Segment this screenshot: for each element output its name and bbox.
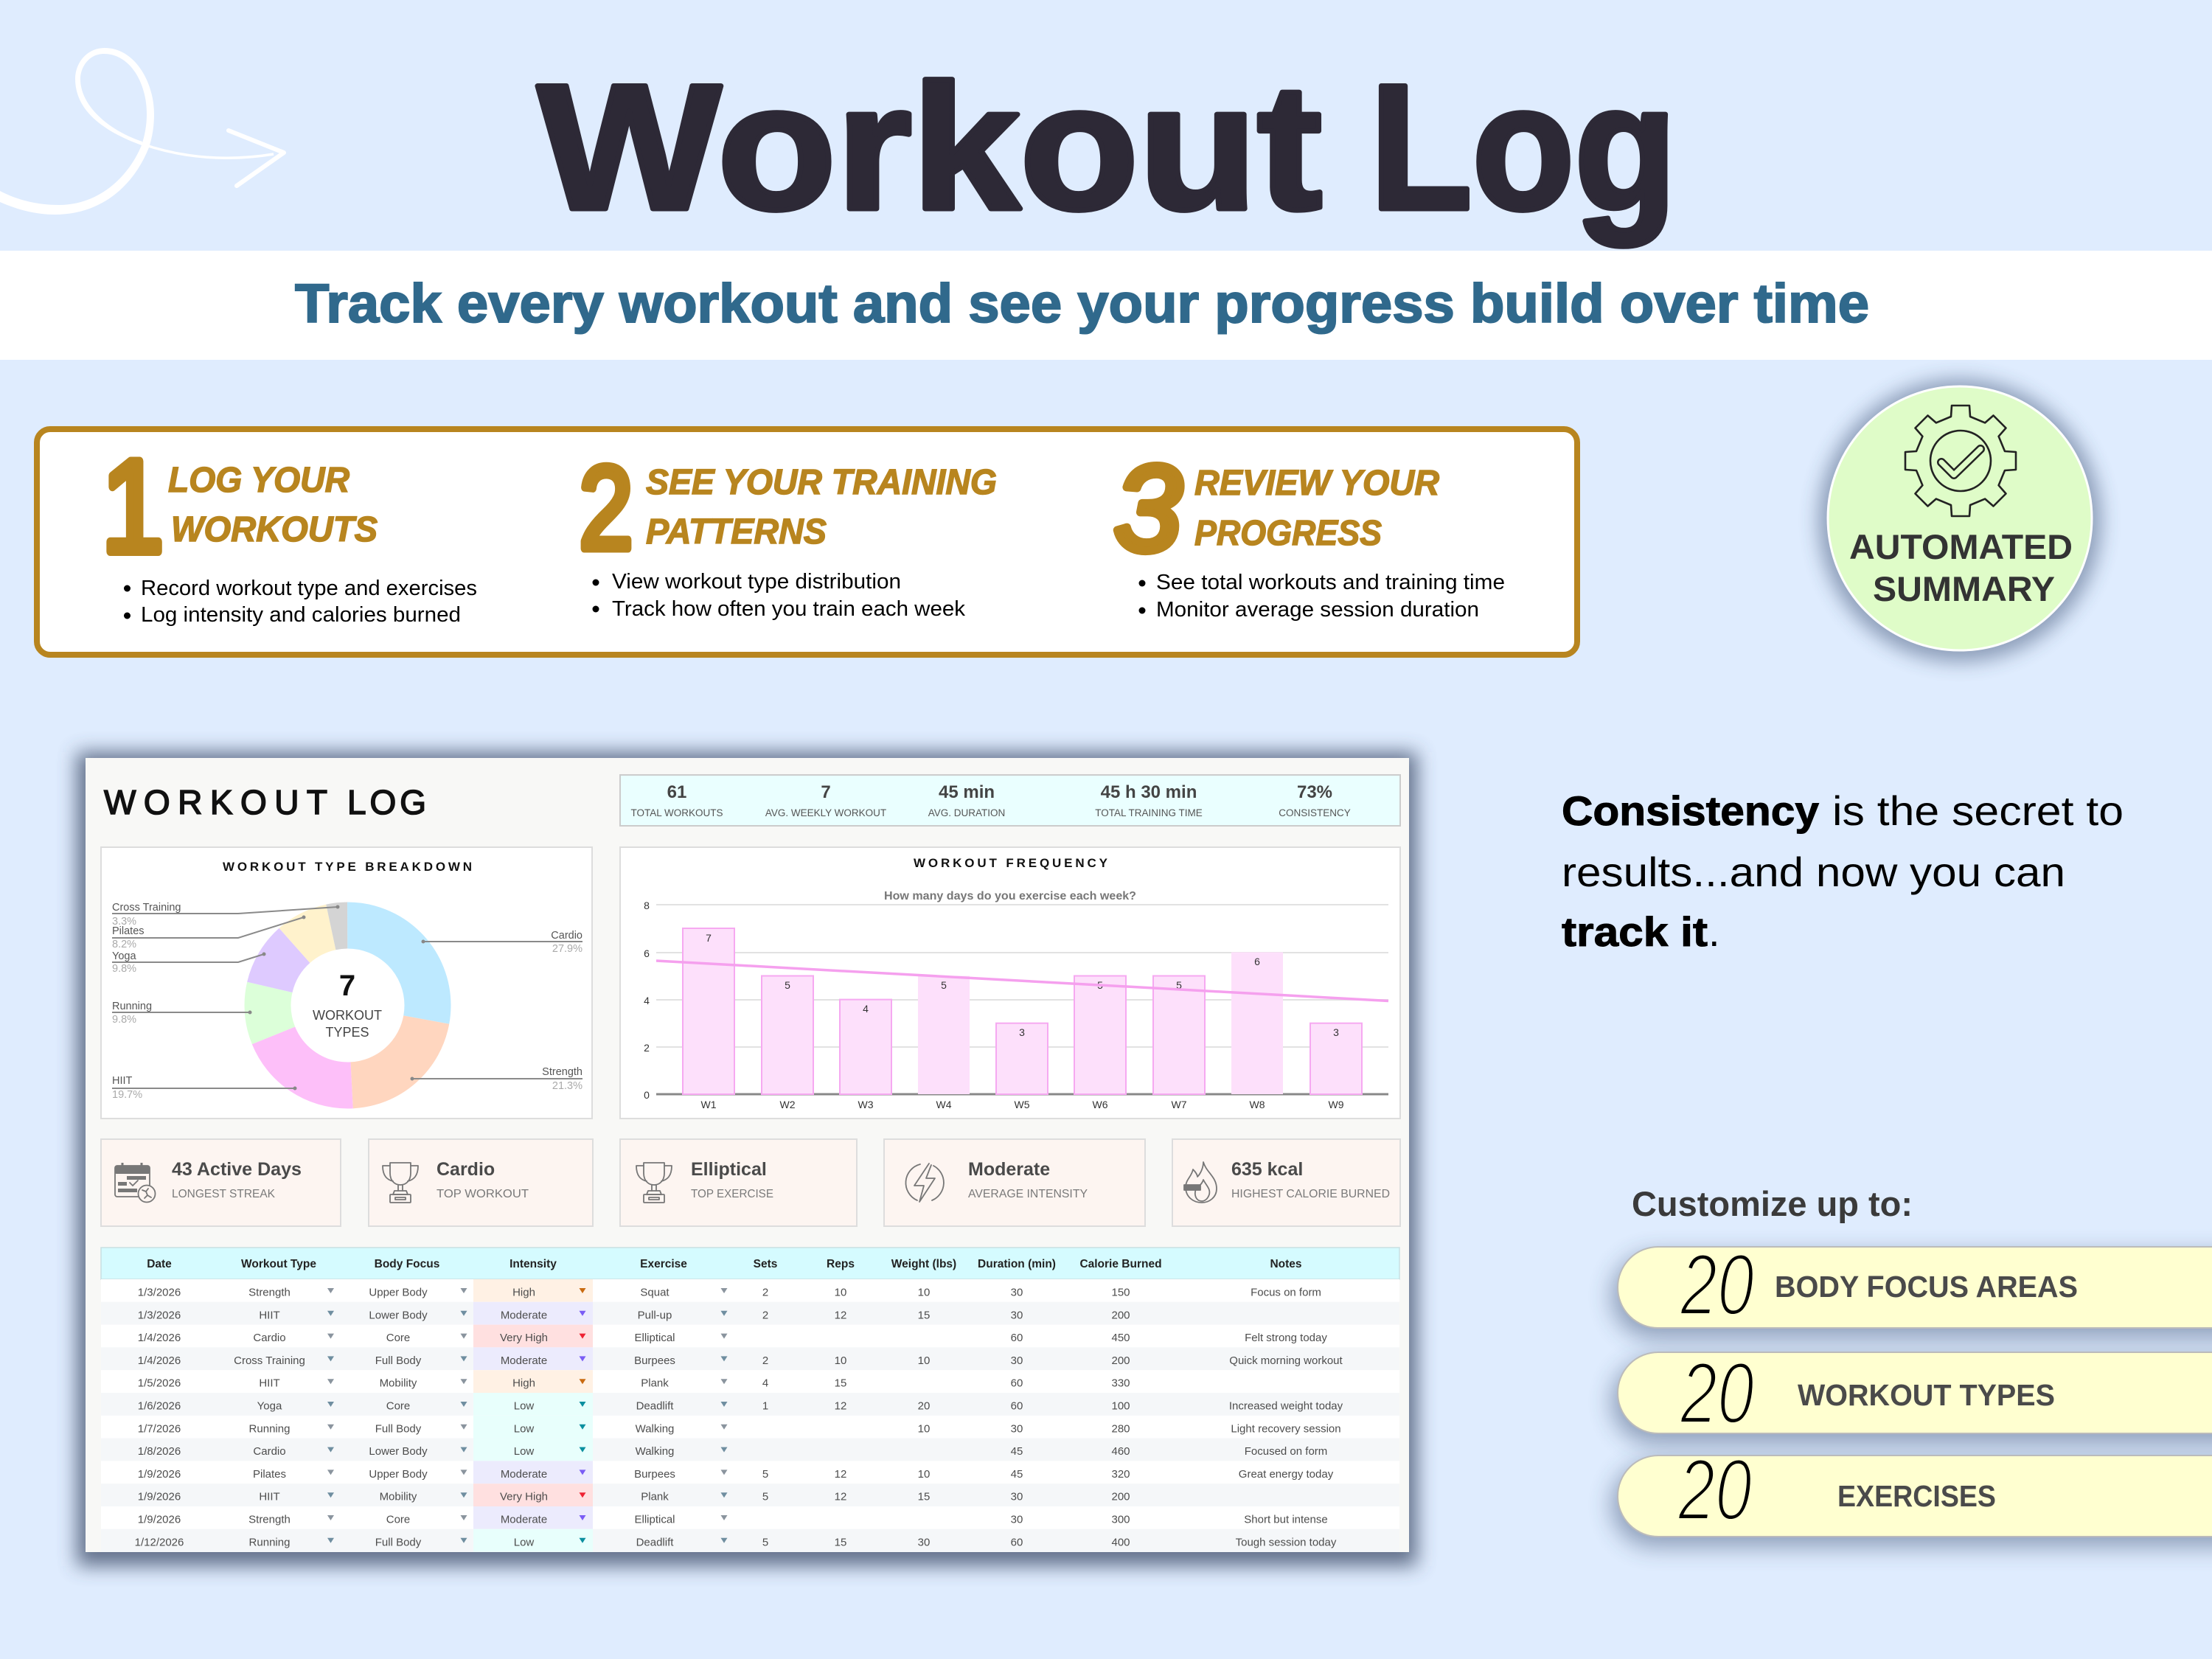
table row 5: Mobility xyxy=(380,1377,417,1390)
bar chart: 8 xyxy=(644,900,650,911)
step 3: 3 xyxy=(1114,441,1182,576)
stat card: top exercise: TOP EXERCISE xyxy=(691,1188,773,1200)
bar chart: 0 xyxy=(644,1089,650,1101)
stat card: average intensity xyxy=(884,1139,1145,1226)
donut centre label: WORKOUT xyxy=(313,1008,382,1023)
table row 3: Felt strong today xyxy=(1245,1332,1327,1344)
table row 11: Moderate xyxy=(501,1513,547,1526)
table row 7: 280 xyxy=(1111,1422,1130,1435)
stat card: active days xyxy=(101,1139,341,1226)
stat card: top workout xyxy=(369,1139,593,1226)
pill: body focus areas: BODY FOCUS AREAS xyxy=(1775,1270,2078,1304)
title: Log xyxy=(1370,48,1677,247)
table row 12: 5 xyxy=(762,1536,768,1548)
table row 2: HIIT xyxy=(259,1309,280,1321)
table header: Notes xyxy=(1270,1258,1302,1270)
icon: flame xyxy=(1184,1162,1217,1203)
table row 4: 10 xyxy=(835,1354,846,1367)
bar chart: W2 xyxy=(780,1099,796,1110)
bar chart: W7 xyxy=(1171,1099,1187,1110)
table row 10: 1/9/2026 xyxy=(138,1491,181,1503)
text block: consistency message xyxy=(1562,787,2124,955)
pill: workout types xyxy=(1612,1345,2212,1444)
table row 2: 30 xyxy=(1011,1309,1023,1321)
table row 1: 10 xyxy=(835,1286,846,1299)
bar chart: 4 xyxy=(644,995,650,1006)
icon: calendar xyxy=(115,1163,155,1202)
title: Workout xyxy=(538,48,1322,247)
bar chart: 7 xyxy=(706,932,712,944)
table row 10 xyxy=(101,1484,1399,1506)
stat card: active days: 43 Active Days xyxy=(172,1159,302,1180)
table row 1: Squat xyxy=(640,1286,669,1299)
table row 2: 2 xyxy=(762,1309,768,1321)
table row 8: 460 xyxy=(1111,1445,1130,1458)
donut leader lines and labels: 8.2% xyxy=(112,939,136,950)
table row 6: 60 xyxy=(1011,1399,1023,1413)
step 2: 2 xyxy=(580,443,633,574)
donut leader lines and labels: Yoga xyxy=(112,950,136,962)
badge: automated summary: AUTOMATED xyxy=(1849,527,2073,566)
table row 6: Increased weight today xyxy=(1229,1399,1343,1413)
kpi strip: 7 xyxy=(821,782,831,802)
table row 6: 1/6/2026 xyxy=(138,1399,181,1413)
table row 5: 15 xyxy=(835,1377,846,1390)
table row 10: 200 xyxy=(1111,1491,1130,1503)
table row 5: 330 xyxy=(1111,1377,1130,1390)
table row 9: 10 xyxy=(918,1468,930,1481)
donut leader lines and labels: Pilates xyxy=(112,925,145,937)
panel: dashboard screenshot xyxy=(77,752,1417,1566)
kpi strip xyxy=(620,775,1400,826)
bar chart: 4 xyxy=(863,1003,869,1015)
table row 2: 1/3/2026 xyxy=(138,1309,181,1321)
table row 4: 1/4/2026 xyxy=(138,1354,181,1367)
table row 5: High xyxy=(512,1377,535,1390)
table row 6: 20 xyxy=(918,1399,930,1413)
table row 4: 10 xyxy=(918,1354,930,1367)
table row 9 xyxy=(101,1461,1399,1484)
table header: Intensity xyxy=(509,1258,557,1270)
table row 1: 10 xyxy=(918,1286,930,1299)
step 2: SEE YOUR TRAINING xyxy=(646,463,997,502)
table row 8: Walking xyxy=(636,1445,674,1458)
bar chart: 5 xyxy=(1097,979,1103,991)
table row 11: Elliptical xyxy=(634,1513,675,1526)
table row 6: Core xyxy=(386,1399,410,1413)
donut leader lines and labels: 9.8% xyxy=(112,1014,136,1026)
kpi strip: 73% xyxy=(1297,782,1332,802)
bar chart: W6 xyxy=(1093,1099,1108,1110)
step 2: View workout type distribution xyxy=(612,570,901,594)
bar chart: W3 xyxy=(858,1099,874,1110)
table row 4: Cross Training xyxy=(234,1354,305,1367)
title xyxy=(538,48,1677,247)
table row 6: Yoga xyxy=(257,1399,282,1413)
step 2: PATTERNS xyxy=(646,512,827,552)
table row 4: Full Body xyxy=(375,1354,422,1367)
table row 10: HIIT xyxy=(259,1491,280,1503)
text block: consistency message: . xyxy=(1708,908,1720,955)
table row 11: 30 xyxy=(1011,1513,1023,1526)
donut centre label: TYPES xyxy=(325,1025,369,1040)
table row 12: Running xyxy=(249,1536,290,1548)
table row 12: Tough session today xyxy=(1236,1536,1337,1548)
kpi strip: 45 h 30 min xyxy=(1101,782,1197,802)
step 3: PROGRESS xyxy=(1194,514,1382,553)
table row 2: 200 xyxy=(1111,1309,1130,1321)
pill: workout types: WORKOUT TYPES xyxy=(1798,1378,2055,1412)
stat card: top exercise xyxy=(620,1139,857,1226)
stat card: top workout: Cardio xyxy=(437,1159,495,1180)
trend line xyxy=(656,961,1388,1001)
table row 1: High xyxy=(512,1286,535,1299)
donut leader lines and labels: 21.3% xyxy=(552,1080,582,1092)
bar chart: 3 xyxy=(1333,1026,1339,1038)
table row 10: Plank xyxy=(641,1491,669,1503)
stat card: top exercise: Elliptical xyxy=(691,1159,767,1180)
donut centre label: 7 xyxy=(339,970,355,1002)
table row 1: 30 xyxy=(1011,1286,1023,1299)
table row 2: Lower Body xyxy=(369,1309,428,1321)
donut leader lines and labels: 9.8% xyxy=(112,963,136,975)
icon: trophy xyxy=(383,1163,418,1203)
donut chart xyxy=(268,925,428,1085)
dashboard title xyxy=(104,783,426,821)
table row 9: 1/9/2026 xyxy=(138,1468,181,1481)
table row 7: Walking xyxy=(636,1422,674,1435)
table row 1: 1/3/2026 xyxy=(138,1286,181,1299)
table row 1: 150 xyxy=(1111,1286,1130,1299)
table row 6: 100 xyxy=(1111,1399,1130,1413)
bar chart: 5 xyxy=(1176,979,1182,991)
table row 3: Core xyxy=(386,1332,410,1344)
bar chart xyxy=(644,900,1388,1110)
text block: consistency message: track it xyxy=(1562,908,1708,955)
pill: exercises xyxy=(1612,1441,2212,1547)
table header: Workout Type xyxy=(241,1258,316,1270)
table row 9: Upper Body xyxy=(369,1468,428,1481)
icon: trophy xyxy=(636,1163,672,1203)
table row 10: Mobility xyxy=(380,1491,417,1503)
panel: three steps xyxy=(37,429,1577,655)
bar chart: W1 xyxy=(700,1099,717,1110)
table row 8 xyxy=(101,1439,1399,1461)
kpi strip: TOTAL WORKOUTS xyxy=(630,807,723,818)
table row 11 xyxy=(101,1506,1399,1529)
stat card: top workout: TOP WORKOUT xyxy=(437,1188,529,1200)
table row 9: Moderate xyxy=(501,1468,547,1481)
stat card: calorie burned xyxy=(1172,1139,1400,1226)
table row 3: Cardio xyxy=(253,1332,286,1344)
panel: workout type breakdown xyxy=(101,847,592,1119)
table row 10: 30 xyxy=(1011,1491,1023,1503)
bar chart: W5 xyxy=(1015,1099,1030,1110)
pill: exercises: 20 xyxy=(1677,1441,1752,1539)
stat card: calorie burned: HIGHEST CALORIE BURNED xyxy=(1231,1188,1390,1200)
table row 3: 60 xyxy=(1011,1332,1023,1344)
text block: consistency message: Consistency xyxy=(1562,787,1819,834)
table header xyxy=(101,1248,1399,1279)
table row 4: Burpees xyxy=(634,1354,675,1367)
table row 2 xyxy=(101,1302,1399,1325)
table row 7: Light recovery session xyxy=(1231,1422,1341,1435)
bar chart: 6 xyxy=(1254,956,1260,967)
donut leader lines and labels xyxy=(112,902,582,1101)
table row 11: Strength xyxy=(248,1513,291,1526)
table row 12: 60 xyxy=(1011,1536,1023,1548)
table row 4: 200 xyxy=(1111,1354,1130,1367)
donut leader lines and labels: 3.3% xyxy=(112,916,136,928)
table row 9: 320 xyxy=(1111,1468,1130,1481)
table row 2: Moderate xyxy=(501,1309,547,1321)
table row 7: Running xyxy=(249,1422,290,1435)
table row 8: 1/8/2026 xyxy=(138,1445,181,1458)
table row 4 xyxy=(101,1347,1399,1370)
table header: Calorie Burned xyxy=(1079,1258,1162,1270)
kpi strip: CONSISTENCY xyxy=(1279,807,1351,818)
pill: exercises: EXERCISES xyxy=(1837,1479,1996,1513)
table row 11: Short but intense xyxy=(1244,1513,1328,1526)
table row 7: 10 xyxy=(918,1422,930,1435)
table row 12: Deadlift xyxy=(636,1536,674,1548)
table row 1: Upper Body xyxy=(369,1286,428,1299)
subtitle: Track every workout and see your progress build over time xyxy=(295,273,1869,334)
subtitle band xyxy=(0,251,2212,360)
table row 12: 30 xyxy=(918,1536,930,1548)
table row 12 xyxy=(101,1529,1399,1552)
table row 12: 400 xyxy=(1111,1536,1130,1548)
dashboard title: LOG xyxy=(347,783,426,821)
donut centre label xyxy=(313,970,382,1040)
kpi strip: 45 min xyxy=(939,782,995,802)
chart title: WORKOUT TYPE BREAKDOWN xyxy=(223,860,472,874)
donut leader lines and labels: Cardio xyxy=(551,930,582,942)
table row 5 xyxy=(101,1370,1399,1393)
icon: decorative loop arrow xyxy=(0,48,284,215)
bar chart: 5 xyxy=(941,979,947,991)
table row 10: 5 xyxy=(762,1491,768,1503)
step 3: See total workouts and training time xyxy=(1156,571,1505,594)
kpi strip: 61 xyxy=(667,782,686,802)
table row 7 xyxy=(101,1416,1399,1439)
table row 12: 1/12/2026 xyxy=(135,1536,184,1548)
table row 7: Full Body xyxy=(375,1422,422,1435)
dashboard title: WORKOUT xyxy=(104,783,327,821)
table row 5: 60 xyxy=(1011,1377,1023,1390)
table row 9: Great energy today xyxy=(1239,1468,1334,1481)
bar chart: 6 xyxy=(644,947,650,959)
table row 7: Low xyxy=(514,1422,534,1435)
step 1 xyxy=(102,433,477,627)
panel: workout frequency xyxy=(620,847,1400,1119)
table row 9: Pilates xyxy=(253,1468,286,1481)
table row 11: Core xyxy=(386,1513,410,1526)
text block: consistency message: results...and now you can xyxy=(1562,849,2065,895)
table row 2: 12 xyxy=(835,1309,846,1321)
pill: body focus areas xyxy=(1612,1237,2212,1338)
step 1: Record workout type and exercises xyxy=(141,577,477,600)
text block: consistency message: is the secret to xyxy=(1832,787,2124,834)
bar chart: 3 xyxy=(1019,1026,1025,1038)
step 1: Log intensity and calories burned xyxy=(141,603,461,627)
table row 6: 12 xyxy=(835,1399,846,1413)
step 3 xyxy=(1114,441,1505,622)
table row 5: HIIT xyxy=(259,1377,280,1390)
bar chart: W9 xyxy=(1329,1099,1344,1110)
table header: Exercise xyxy=(640,1258,687,1270)
step 3: REVIEW YOUR xyxy=(1194,464,1439,503)
chart title: WORKOUT FREQUENCY xyxy=(914,856,1108,870)
table row 8: Focused on form xyxy=(1245,1445,1327,1458)
table row 10: 12 xyxy=(835,1491,846,1503)
pill: body focus areas: 20 xyxy=(1680,1237,1754,1334)
table row 8: Lower Body xyxy=(369,1445,428,1458)
table row 3: Elliptical xyxy=(634,1332,675,1344)
table row 10: 15 xyxy=(918,1491,930,1503)
table row 1: Strength xyxy=(248,1286,291,1299)
table row 6: Deadlift xyxy=(636,1399,674,1413)
pill: workout types: 20 xyxy=(1680,1345,1754,1442)
table row 9: 12 xyxy=(835,1468,846,1481)
badge: automated summary xyxy=(1818,379,2101,662)
donut leader lines and labels: 19.7% xyxy=(112,1089,142,1101)
step 2: Track how often you train each week xyxy=(612,597,965,621)
table row 6 xyxy=(101,1393,1399,1416)
stat card: active days: LONGEST STREAK xyxy=(172,1188,276,1200)
table header: Date xyxy=(147,1258,172,1270)
donut leader lines and labels: 27.9% xyxy=(552,943,582,955)
table row 3 xyxy=(101,1325,1399,1347)
table row 9: 45 xyxy=(1011,1468,1023,1481)
donut leader lines and labels: Strength xyxy=(542,1066,582,1078)
table header: Duration (min) xyxy=(978,1258,1056,1270)
icon: gear with check xyxy=(1905,406,2016,516)
table row 8: Cardio xyxy=(253,1445,286,1458)
table row 8: 45 xyxy=(1011,1445,1023,1458)
stat card: calorie burned: 635 kcal xyxy=(1231,1159,1303,1180)
step 1: LOG YOUR xyxy=(168,461,349,500)
table row 7: 1/7/2026 xyxy=(138,1422,181,1435)
kpi strip: TOTAL TRAINING TIME xyxy=(1095,807,1203,818)
stat card: average intensity: Moderate xyxy=(968,1159,1050,1180)
table row 3: Very High xyxy=(500,1332,548,1344)
table row 3: 450 xyxy=(1111,1332,1130,1344)
bar chart: 2 xyxy=(644,1042,650,1054)
icon: lightning xyxy=(905,1164,944,1202)
table header: Reps xyxy=(827,1258,855,1270)
table row 8: Low xyxy=(514,1445,534,1458)
table header: Body Focus xyxy=(375,1258,439,1270)
table row 9: 5 xyxy=(762,1468,768,1481)
table row 1: Focus on form xyxy=(1251,1286,1321,1299)
workout table xyxy=(101,1248,1399,1552)
table header: Weight (lbs) xyxy=(891,1258,956,1270)
table row 5: 1/5/2026 xyxy=(138,1377,181,1390)
table row 12: 15 xyxy=(835,1536,846,1548)
table row 6: 1 xyxy=(762,1399,768,1413)
table row 2: Pull-up xyxy=(638,1309,672,1321)
step 1: WORKOUTS xyxy=(171,510,378,549)
table row 4: Moderate xyxy=(501,1354,547,1367)
table row 1 xyxy=(101,1279,1399,1302)
badge: automated summary: SUMMARY xyxy=(1873,569,2055,608)
table row 9: Burpees xyxy=(634,1468,675,1481)
table row 6: Low xyxy=(514,1399,534,1413)
table row 12: Full Body xyxy=(375,1536,422,1548)
kpi strip: AVG. DURATION xyxy=(928,807,1005,818)
kpi strip: AVG. WEEKLY WORKOUT xyxy=(765,807,886,818)
step 3: Monitor average session duration xyxy=(1156,598,1479,622)
table row 7: 30 xyxy=(1011,1422,1023,1435)
table row 3: 1/4/2026 xyxy=(138,1332,181,1344)
donut leader lines and labels: Cross Training xyxy=(112,902,181,914)
table row 1: 2 xyxy=(762,1286,768,1299)
table row 5: 4 xyxy=(762,1377,768,1390)
stat card: average intensity: AVERAGE INTENSITY xyxy=(968,1188,1088,1200)
donut leader lines and labels: Running xyxy=(112,1001,152,1012)
table row 4: Quick morning workout xyxy=(1229,1354,1343,1367)
bar chart: 5 xyxy=(785,979,790,991)
step 2 xyxy=(580,443,997,621)
donut leader lines and labels: HIIT xyxy=(112,1075,133,1087)
table row 4: 2 xyxy=(762,1354,768,1367)
table row 4: 30 xyxy=(1011,1354,1023,1367)
table header: Sets xyxy=(754,1258,777,1270)
table row 11: 1/9/2026 xyxy=(138,1513,181,1526)
chart subtitle: How many days do you exercise each week? xyxy=(884,890,1136,902)
table row 11: 300 xyxy=(1111,1513,1130,1526)
bar chart: W8 xyxy=(1249,1099,1265,1110)
heading: customize: Customize up to: xyxy=(1632,1184,1913,1223)
table row 5: Plank xyxy=(641,1377,669,1390)
table row 2: 15 xyxy=(918,1309,930,1321)
step 1: 1 xyxy=(102,433,164,580)
table row 10: Very High xyxy=(500,1491,548,1503)
bar chart: W4 xyxy=(936,1099,952,1110)
table row 12: Low xyxy=(514,1536,534,1548)
